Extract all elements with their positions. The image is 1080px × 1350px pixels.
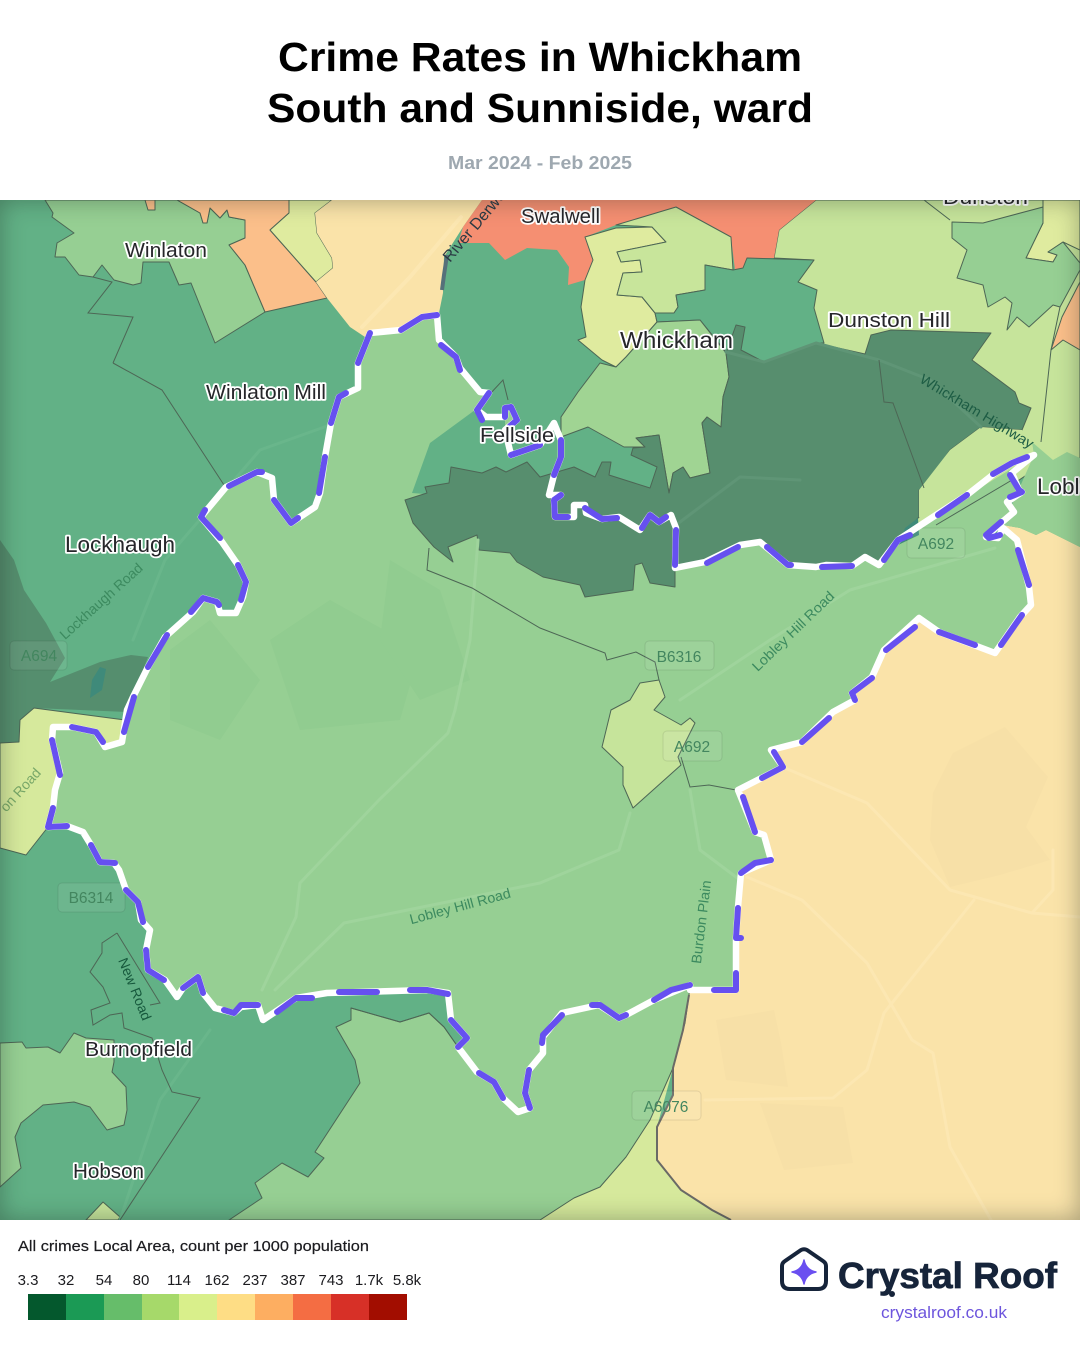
place labels: Burnopfield [85,1039,192,1061]
choropleth map [0,200,1080,1220]
road labels: Lobley Hill Road [408,885,512,927]
road number badges: A692 [674,739,710,756]
ward outline: white base [48,315,1034,1112]
panel: map regions [0,200,1080,1220]
road labels: Lobley Hill Road [749,588,837,674]
icon: house with star [782,1249,826,1289]
road number badges: B6316 [657,649,701,666]
place labels: Winlaton [125,240,207,262]
legend scale values: 162 [204,1272,230,1289]
place labels: Winlaton Mill [206,382,326,404]
legend scale values: 237 [242,1272,268,1289]
road labels [0,177,1037,1023]
legend scale values [18,1272,422,1289]
place labels [65,187,1080,1183]
legend scale values: 114 [167,1272,191,1289]
legend title: All crimes Local Area, count per 1000 population [18,1238,369,1255]
road number badges: B6314 [69,890,114,907]
website url: crystalroof.co.uk [881,1304,1008,1322]
legend colour bar [28,1294,407,1320]
place labels: Whickham [620,327,733,353]
subtitle: date range: Mar 2024 - Feb 2025 [448,153,632,173]
road labels: Burdon Plain [688,879,714,965]
road labels: Lockhaugh Road [56,560,146,642]
legend scale values: 3.3 [18,1272,38,1289]
legend scale values: 743 [318,1272,344,1289]
roads [120,217,1080,1220]
place labels: Swalwell [521,206,600,228]
legend [18,1238,422,1320]
place labels: Lockhaugh [65,532,175,557]
legend scale values: 32 [58,1272,74,1289]
road number badges [10,528,965,1120]
road number badges: A694 [21,648,57,665]
heading: title lines: South and Sunniside, ward [267,85,813,131]
legend scale values: 387 [280,1272,306,1289]
panel: inner ward neighbourhoods [90,320,1034,808]
place labels: Fellside [480,425,554,447]
road labels: Whickham Highway [917,371,1037,451]
place labels: Dunston Hill [828,310,950,332]
legend scale values: 80 [133,1272,149,1289]
road number badges: A6076 [644,1099,688,1116]
legend scale values: 5.8k [393,1272,422,1289]
title [267,34,813,173]
road labels: New Road [115,955,155,1023]
heading: title lines [267,34,813,131]
place labels: Hobson [73,1161,144,1183]
boundary lines [88,200,1060,1220]
legend scale values: 1.7k [355,1272,384,1289]
brand name: Crystal Roof [838,1255,1058,1296]
road number badges: A692 [918,536,954,553]
ward outline: purple dashes [48,315,1029,1108]
legend scale values: 54 [96,1272,112,1289]
heading: title lines: Crime Rates in Whickham [278,34,802,80]
logo: Crystal Roof [780,1247,1058,1322]
panel: ward area [48,315,1034,1112]
